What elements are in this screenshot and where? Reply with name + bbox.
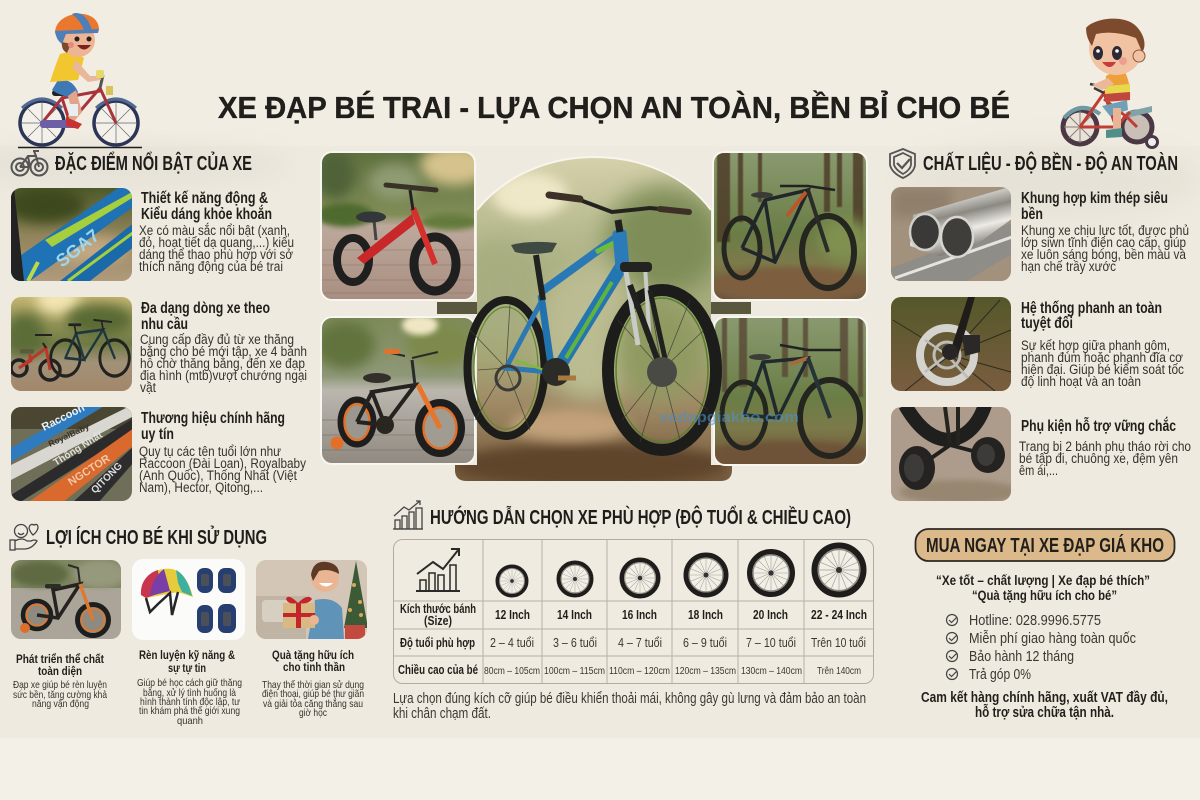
material text: steel frame — [1021, 190, 1189, 274]
illustration: boy riding bike, left — [18, 13, 142, 147]
feature text: genuine brands: Raccoon (Đài Loan), Royalbaby — [139, 456, 306, 471]
row: wheel size: 18 Inch — [688, 608, 723, 622]
benefit text: skills and confidence: quanh — [177, 715, 203, 727]
panel: materials and safety — [890, 149, 1191, 504]
row: wheel size: 20 Inch — [753, 608, 788, 622]
material text: brakes: Hệ thống phanh an toàn — [1021, 300, 1162, 317]
material text: brakes: Sự kết hợp giữa phanh gôm, — [1021, 338, 1170, 353]
benefit text: gift for the spirit: Quà tặng hữu ích — [272, 648, 354, 662]
title: XE ĐẠP BÉ TRAI - LỰA CHỌN AN TOÀN, BỀN BỈ CHO BÉ — [218, 90, 1010, 125]
row: suitable age: 3 – 6 tuổi — [553, 635, 597, 650]
panel: features — [5, 151, 307, 503]
commitment: hỗ trợ sửa chữa tận nhà. — [975, 704, 1114, 721]
slogans: “Quà tặng hữu ích cho bé” — [972, 587, 1117, 603]
feature text: many bike types: bằng cho bé mới tập, xe 4 bánh — [140, 344, 307, 359]
benefit text: gift for the spirit: giờ học — [299, 707, 327, 719]
button: buy now — [916, 529, 1174, 561]
photo: balance bike and mountain bike — [11, 297, 132, 391]
watermark: xedapgiakho.com — [659, 409, 799, 426]
benefit text: skills and confidence: Rèn luyện kỹ năng & — [139, 648, 235, 662]
benefit text: physical development: sức bền, tăng cường khả — [13, 689, 107, 701]
benefit text: physical development: toàn diện — [38, 664, 82, 678]
row: child height: Chiều cao của bé — [398, 663, 478, 677]
note below table — [393, 691, 866, 722]
benefit text: gift for the spirit: Thay thế thời gian sử dụng — [262, 679, 364, 691]
row: child height: 80cm – 105cm — [484, 666, 540, 677]
photo: brand-labelled frame tubes: RoyalBaby — [47, 421, 91, 449]
row: suitable age: 7 – 10 tuổi — [746, 635, 796, 650]
feature text: many bike types: nhu cầu — [141, 316, 188, 333]
row: suitable age — [400, 635, 866, 650]
row: wheel size: 16 Inch — [622, 608, 657, 622]
benefit text: skills and confidence: sự tự tin — [168, 661, 206, 675]
row: wheel size: Kích thước bánh — [400, 602, 476, 616]
feature text: genuine brands — [139, 410, 306, 495]
row: suitable age: 2 – 4 tuổi — [490, 635, 534, 650]
photo: brand-labelled frame tubes: Raccoon — [40, 402, 87, 434]
feature text: dynamic design — [139, 190, 294, 274]
photo: blue frame close-up — [11, 188, 132, 281]
material text: brakes — [1021, 300, 1184, 389]
photo: kid bike on path — [11, 560, 126, 639]
photo: mountain bike in forest, bottom — [715, 318, 866, 464]
benefit text: skills and confidence: hình thành tính độc lập, tư — [140, 696, 240, 708]
checklist: Hotline: 028.9996.5775 — [969, 613, 1101, 629]
checklist: Miễn phí giao hàng toàn quốc — [969, 630, 1136, 647]
feature text: dynamic design: dáng thể thao phù hợp với sở — [139, 247, 293, 262]
material text: accessories: bé tập đi, chuông xe, đệm yên — [1019, 451, 1178, 466]
heading: size guide: HƯỚNG DẪN CHỌN XE PHÙ HỢP (ĐỘ TUỔI & CHIỀU CAO) — [430, 505, 851, 529]
illustration: main blue mountain bike — [468, 195, 799, 450]
checklist: Trả góp 0% — [969, 667, 1031, 683]
icon: shield with check — [890, 149, 915, 178]
benefit text: skills and confidence: tin khám phá thế giới xung — [139, 705, 240, 717]
photo: red balance bike — [322, 153, 474, 299]
feature text: genuine brands: Quy tụ các tên tuổi lớn như — [139, 444, 281, 459]
icon: table growth chart — [416, 549, 460, 591]
icon: hand with heart and smile — [10, 524, 38, 550]
feature text: genuine brands: (Anh Quốc), Thống Nhất (Việt — [139, 468, 297, 483]
heading: features: ĐẶC ĐIỂM NỔI BẬT CỦA XE — [55, 151, 252, 175]
benefit text: physical development: Đạp xe giúp bé rèn luyện — [13, 679, 107, 691]
photo: brand-labelled frame tubes — [11, 402, 134, 503]
feature text: many bike types: Đa dạng dòng xe theo — [141, 300, 270, 317]
material text: steel frame: hạn chế trầy xước — [1021, 259, 1116, 274]
feature text: genuine brands: uy tín — [141, 426, 174, 443]
benefit text: skills and confidence: Giúp bé học cách giữ thăng — [137, 677, 242, 689]
row: child height: 100cm – 115cm — [544, 666, 605, 677]
feature text: dynamic design: Thiết kế năng động & — [141, 190, 268, 207]
row: wheel size — [400, 602, 867, 628]
benefit text: gift for the spirit: cho tinh thần — [283, 660, 345, 674]
benefit text: skills and confidence: bằng, xử lý tình huống là — [143, 686, 236, 699]
photo: rainbow helmet and pads — [132, 559, 245, 640]
panel: size guide — [393, 501, 874, 722]
photo: orange kid bike with training wheels — [315, 315, 475, 464]
feature text: many bike types: vật — [140, 380, 156, 395]
feature text: many bike types — [140, 300, 307, 395]
photo: brand-labelled frame tubes: QITONG — [89, 460, 125, 496]
wheels row — [497, 546, 863, 596]
panel: central photo collage — [315, 145, 875, 487]
checklist — [946, 613, 1136, 683]
commitment — [921, 690, 1168, 721]
row: wheel size: 12 Inch — [495, 608, 530, 622]
material text: brakes: phanh đùm hoặc phanh đĩa cơ — [1021, 350, 1183, 365]
checklist: Bảo hành 12 tháng — [969, 649, 1074, 665]
row: wheel size: 14 Inch — [557, 608, 592, 622]
row: suitable age: 6 – 9 tuổi — [683, 635, 727, 650]
row: suitable age: Độ tuổi phù hợp — [400, 636, 475, 650]
size table — [394, 540, 874, 684]
slogans — [936, 572, 1150, 603]
photo: disc brake — [891, 297, 1011, 391]
benefit text: physical development: Phát triển thể chất — [16, 652, 104, 666]
icon: bicycle outline — [12, 151, 48, 176]
material text: brakes: tuyệt đối — [1021, 315, 1073, 332]
icon: growth chart — [393, 501, 423, 529]
photo: training wheels — [891, 407, 1011, 501]
row: child height: 110cm – 120cm — [609, 666, 670, 677]
feature text: dynamic design: thích năng động của bé trai — [139, 259, 283, 274]
heading: benefits: LỢI ÍCH CHO BÉ KHI SỬ DỤNG — [46, 525, 267, 549]
feature text: genuine brands: Thương hiệu chính hãng — [141, 410, 285, 427]
feature text: genuine brands: Nam), Hector, Qitong,... — [139, 480, 263, 495]
photo: blue frame close-up: SGA7 — [52, 225, 103, 271]
material text: brakes: độ linh hoạt và an toàn — [1021, 374, 1141, 389]
benefit text: gift for the spirit: điện thoại, giúp bé thư giãn — [262, 688, 364, 700]
row: child height — [398, 663, 861, 677]
material text: steel frame: bền — [1021, 206, 1043, 223]
photo: brand-labelled frame tubes: NGCTOR — [66, 453, 112, 489]
feature text: dynamic design: Kiểu dáng khỏe khoắn — [141, 204, 272, 223]
feature text: dynamic design: Xe có màu sắc nổi bật (xanh, — [139, 223, 290, 238]
benefit text: physical development — [13, 652, 107, 710]
row: suitable age: Trên 10 tuổi — [811, 635, 866, 650]
slogans: “Xe tốt – chất lượng | Xe đạp bé thích” — [936, 572, 1150, 588]
row: wheel size: 22 - 24 Inch — [811, 608, 867, 622]
feature text: dynamic design: đỏ, hoạt tiết dạ quang,...) kiểu — [139, 235, 294, 250]
note below table: khi chân chạm đất. — [393, 706, 491, 722]
illustration: boy riding bike with training wheels, right — [1063, 19, 1158, 147]
row: child height: 130cm – 140cm — [741, 666, 802, 677]
feature text: many bike types: Cung cấp đầy đủ từ xe thăng — [140, 332, 294, 347]
feature text: many bike types: hỗ chờ thăng bằng, đến xe đạp — [140, 356, 305, 371]
photo: main background — [430, 150, 760, 487]
material text: accessories: êm ái,... — [1019, 463, 1058, 478]
note below table: Lựa chọn đúng kích cỡ giúp bé điều khiển thoải mái, không gây gù lưng và đảm bảo an toàn — [393, 691, 866, 707]
row: wheel size: (Size) — [424, 614, 452, 628]
row: suitable age: 4 – 7 tuổi — [618, 635, 662, 650]
row: child height: Trên 140cm — [817, 666, 861, 677]
benefit text: skills and confidence — [137, 648, 242, 727]
row: child height: 120cm – 135cm — [675, 666, 736, 677]
photo: mountain bike in forest, top — [710, 152, 871, 303]
benefit text: gift for the spirit: và giải tỏa căng thẳng sau — [263, 697, 363, 710]
feature text: many bike types: địa hình (mtb)vượt chướng ngại — [140, 368, 307, 383]
photo: steel tubes — [891, 186, 1015, 285]
photo: brand-labelled frame tubes: Thống Nhất — [51, 429, 105, 469]
material text: accessories — [1019, 416, 1191, 478]
panel: call to action — [916, 529, 1174, 721]
photo: boy with gift — [256, 560, 368, 639]
benefit text: physical development: năng vận động — [32, 698, 89, 710]
benefit text: gift for the spirit — [262, 648, 364, 719]
panel: benefits — [10, 524, 368, 727]
